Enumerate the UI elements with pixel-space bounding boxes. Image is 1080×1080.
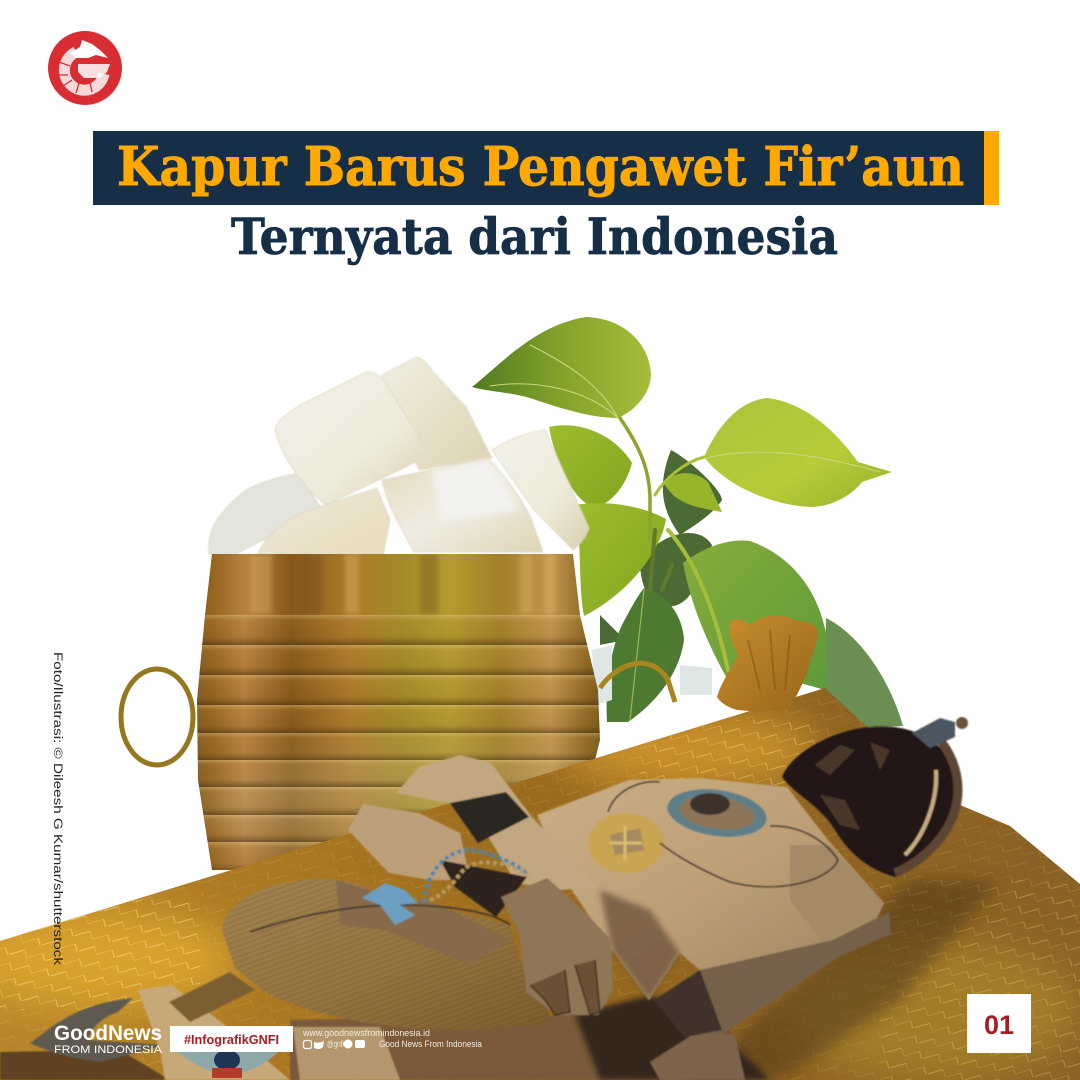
cube: lower left <box>257 488 390 556</box>
leaf: large lower right <box>683 541 827 690</box>
raised bandaged forearm <box>396 755 598 890</box>
lower body wrapping <box>290 1000 760 1080</box>
From Indonesia wordmark: FROM INDONESIA <box>54 1044 163 1056</box>
GoodNews wordmark: GoodNews <box>54 1022 162 1045</box>
scarab pectoral behind hashtag <box>178 1050 278 1078</box>
brass pot <box>121 550 675 875</box>
leaf: small mid-left <box>549 425 632 507</box>
footer branding <box>54 1022 482 1056</box>
gold ring amulet <box>588 813 664 873</box>
headband highlight <box>905 770 936 855</box>
left bandaged arm <box>348 804 470 880</box>
lower right arm <box>654 912 891 1037</box>
credit: photo source: Foto/Ilustrasi: © Dileesh G Kumar/shutterstock <box>51 652 63 965</box>
golden sarcophagus lid <box>0 680 1080 1080</box>
uraeus ornament <box>912 717 968 748</box>
shoulder cloth <box>790 845 884 945</box>
bead strands <box>425 850 528 902</box>
cube: central <box>382 458 543 552</box>
headband <box>895 728 958 873</box>
leaf: small centre <box>664 473 722 512</box>
cube: right slab <box>492 430 589 550</box>
head <box>782 726 961 877</box>
page number badge <box>967 994 1031 1053</box>
leaf: dark lower <box>607 588 684 722</box>
dark arm end <box>654 970 722 1037</box>
torso shade <box>600 890 680 1000</box>
torso wrappings <box>537 778 884 1000</box>
cube: top front <box>275 372 427 505</box>
thin wire necklace <box>250 782 838 932</box>
camphor plant leaves <box>472 317 903 728</box>
dark bottom-left ground <box>0 1050 170 1080</box>
cube: far left <box>209 473 322 556</box>
cream ground at bottom-left <box>138 985 290 1080</box>
leaf: hanging mid <box>575 503 666 616</box>
logo: GNFI garuda emblem <box>48 31 122 105</box>
hashtag badge <box>170 1026 293 1052</box>
social icons <box>304 1040 365 1049</box>
pot body <box>197 554 600 870</box>
beige lower wrap <box>293 1027 400 1080</box>
golden bird statue <box>717 615 818 711</box>
website address: www.goodnewsfromindonesia.id <box>302 1028 430 1038</box>
leaf: top large <box>472 317 651 418</box>
wrapped hand and fingers <box>501 878 613 1015</box>
cube: frosted highlight <box>432 460 520 522</box>
collar fan <box>222 879 552 1029</box>
title banner <box>93 131 999 205</box>
leaf: dark back leaves <box>600 450 722 645</box>
title line two: Ternyata dari Indonesia <box>231 207 838 266</box>
leaf: right bright <box>704 398 892 507</box>
page number badge: 01 <box>984 1010 1014 1040</box>
head highlights <box>815 742 890 830</box>
pot left handle <box>121 669 193 765</box>
dark lower arm <box>440 860 527 917</box>
footer-side relics: left scarab wing <box>30 998 165 1062</box>
wrapped leg end <box>650 1030 745 1080</box>
pot right handle <box>600 663 675 702</box>
dark shadow under torso <box>575 995 770 1080</box>
blue pendant <box>362 883 418 925</box>
mummy <box>0 717 968 1080</box>
social name: Good News From Indonesia <box>379 1039 482 1049</box>
gnfi handle: @gnfi <box>327 1039 344 1049</box>
glass vessel hint behind plant <box>592 645 712 705</box>
dark wrist band <box>450 792 529 843</box>
plant stems <box>490 345 880 720</box>
blue-grey disc amulet <box>664 783 770 843</box>
hashtag badge: #InfografikGNFI <box>184 1032 279 1047</box>
leaf: far right grey-green <box>824 618 903 728</box>
title line one: Kapur Barus Pengawet Fir’aun <box>117 136 964 198</box>
broken plates near collar <box>169 972 255 1022</box>
cube: top back <box>382 357 492 470</box>
camphor cubes <box>209 357 589 556</box>
